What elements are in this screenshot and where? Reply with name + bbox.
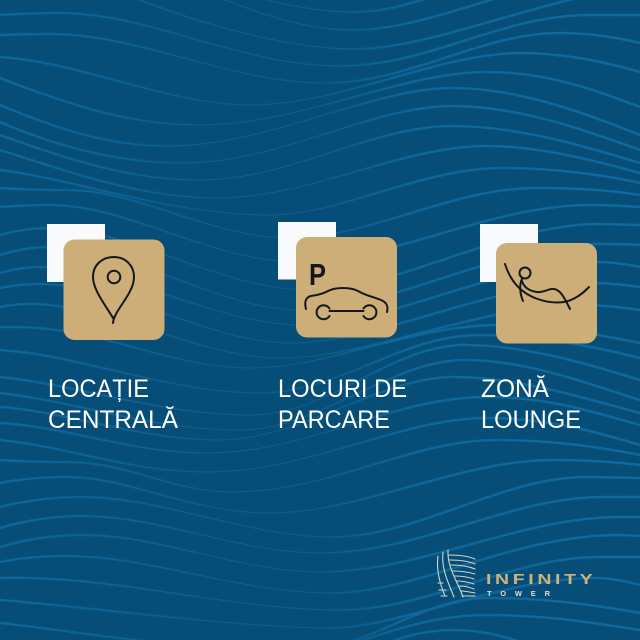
label: locație centrală: LOCAȚIE — [48, 375, 149, 403]
gold card 1 — [64, 240, 164, 340]
white square behind card 1 — [47, 224, 105, 282]
panel: zonă lounge — [480, 224, 597, 434]
label: zonă lounge: LOUNGE — [481, 406, 581, 434]
gold card 3 — [496, 243, 597, 344]
logo wordmark: INFINITY — [486, 570, 593, 587]
icon: person in hammock — [505, 264, 589, 309]
label: zonă lounge: ZONĂ — [481, 374, 549, 403]
panel: locație centrală — [47, 224, 178, 434]
icon: car — [305, 288, 388, 319]
panel: locuri de parcare — [278, 222, 407, 434]
logo subline: TOWER — [487, 589, 551, 598]
logo: infinity tower — [437, 550, 593, 598]
label: locuri de parcare: PARCARE — [278, 406, 390, 434]
label: locuri de parcare: LOCURI DE — [278, 375, 407, 403]
gold card 2 — [296, 237, 397, 338]
label: locuri de parcare — [278, 375, 407, 434]
white square behind card 2 — [278, 222, 336, 280]
icon: parking letter P: P — [309, 257, 326, 292]
label: locație centrală — [48, 375, 178, 434]
icon: map pin — [93, 257, 134, 323]
white square behind card 3 — [480, 224, 538, 282]
label: locație centrală: CENTRALĂ — [48, 405, 178, 434]
icon: tower mark — [437, 550, 475, 597]
label: zonă lounge — [481, 374, 581, 434]
